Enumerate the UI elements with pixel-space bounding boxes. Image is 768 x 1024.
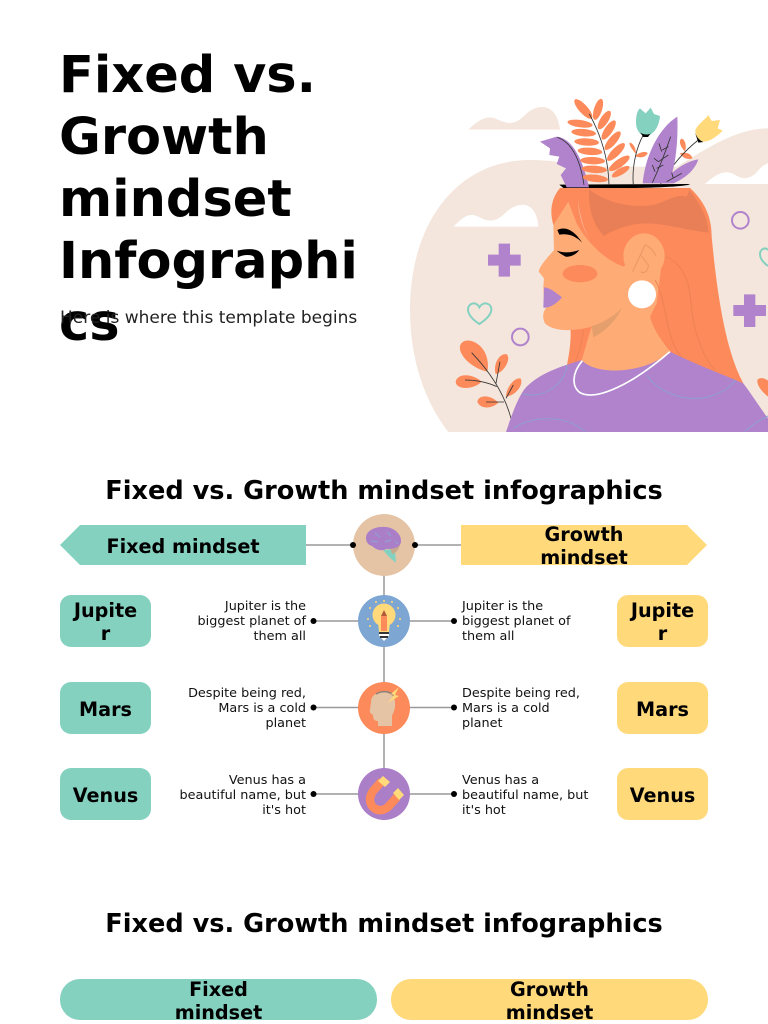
ear: [623, 233, 665, 279]
description: Venus (left): it's hot: [262, 803, 306, 818]
icon: light bulb with pencil: [358, 595, 410, 647]
description: Mars (right): [462, 686, 580, 731]
cheek: [563, 265, 597, 282]
row label: Mars (right): [617, 682, 708, 734]
head opening: [559, 184, 690, 188]
arrow banner: Growth mindset: mindset: [540, 546, 628, 569]
description: Mars (left): planet: [265, 716, 306, 731]
pill: Growth mindset: mindset: [506, 1000, 593, 1024]
lips: [543, 287, 562, 308]
icon: brain: [350, 514, 418, 576]
title: cs: [59, 294, 120, 353]
description: Jupiter (right): Jupiter is the: [462, 599, 543, 614]
row label: Jupiter (right): r: [658, 622, 667, 645]
description: Jupiter (right): biggest planet of: [462, 614, 570, 629]
title: mindset: [59, 170, 292, 229]
row label: Jupiter (left): Jupite: [74, 599, 137, 622]
description: Jupiter (right): [461, 599, 571, 644]
row label: Mars (right): Mars: [636, 698, 689, 720]
illustration: woman with plants growing from her head: [410, 98, 768, 432]
hair strands: [575, 257, 715, 370]
eyelash and brow: [557, 228, 582, 257]
row label: Mars (left): [60, 682, 151, 734]
description: Mars (right): planet: [462, 716, 503, 731]
description: Jupiter (left): biggest planet of: [198, 614, 306, 629]
description: Venus (left): [180, 773, 306, 818]
row label: Jupiter (left): [60, 595, 151, 647]
row label: Venus (right): Venus: [630, 784, 695, 806]
description: Mars (right): Despite being red,: [462, 686, 580, 701]
title: Infographi: [59, 232, 358, 291]
hair front: [551, 188, 711, 267]
shirt seams: [513, 365, 768, 431]
background blob: [410, 107, 768, 432]
description: Mars (left): Mars is a cold: [218, 701, 306, 716]
arrow banner: Growth mindset: Growth: [545, 523, 623, 546]
description: Jupiter (left): [198, 599, 306, 644]
description: Venus (left): beautiful name, but: [180, 788, 306, 803]
row label: Jupiter (right): [617, 595, 708, 647]
heading: second chart: Fixed vs. Growth mindset infographics: [105, 909, 663, 939]
row label: Jupiter (right): Jupite: [631, 599, 694, 622]
fern, tulips and leaves growing from the head: [540, 97, 723, 187]
pill: Growth mindset: Growth: [510, 978, 589, 1000]
description: Venus (left): Venus has a: [229, 773, 306, 788]
subtitle: Here is where this template begins: [60, 308, 357, 328]
description: Venus (right): beautiful name, but: [462, 788, 588, 803]
description: Mars (right): Mars is a cold: [462, 701, 550, 716]
row label: Mars (left): Mars: [79, 698, 132, 720]
title: Growth: [59, 108, 269, 167]
arrow banner: Fixed mindset: [60, 525, 306, 565]
pill: Fixed mindset: [60, 979, 377, 1020]
icon: magnet: [358, 768, 410, 820]
row label: Jupiter (left): r: [101, 622, 110, 645]
row label: Venus (left): Venus: [73, 784, 138, 806]
description: Mars (left): Despite being red,: [188, 686, 306, 701]
lower-left leaf sprig: [456, 340, 768, 418]
arrow banner: Fixed mindset: Fixed mindset: [106, 534, 260, 558]
hair behind shoulders: [560, 188, 743, 383]
title: Fixed vs.: [59, 46, 316, 105]
description: Venus (right): [462, 773, 588, 818]
description: Venus (right): Venus has a: [462, 773, 539, 788]
row label: Venus (right): [617, 768, 708, 820]
icon: head with lightning: [358, 682, 410, 734]
jaw shadow: [592, 308, 622, 337]
row label: Venus (left): [60, 768, 151, 820]
face and neck: [539, 202, 672, 373]
description: Mars (left): [188, 686, 306, 731]
heading: first chart: Fixed vs. Growth mindset infographics: [105, 476, 663, 506]
pill: Fixed mindset: Fixed: [189, 978, 248, 1000]
description: Jupiter (right): them all: [462, 629, 514, 644]
arrow banner: Growth mindset: [461, 525, 707, 565]
decorative plus and outline icons: [468, 212, 768, 345]
description: Jupiter (left): them all: [254, 629, 306, 644]
pill: Fixed mindset: mindset: [175, 1000, 262, 1024]
description: Jupiter (left): Jupiter is the: [225, 599, 306, 614]
title: [59, 46, 358, 353]
shirt: [506, 352, 768, 432]
necklace: [574, 352, 670, 395]
description: Venus (right): it's hot: [462, 803, 506, 818]
earring: [628, 280, 656, 308]
pill: Growth mindset: [391, 979, 708, 1020]
